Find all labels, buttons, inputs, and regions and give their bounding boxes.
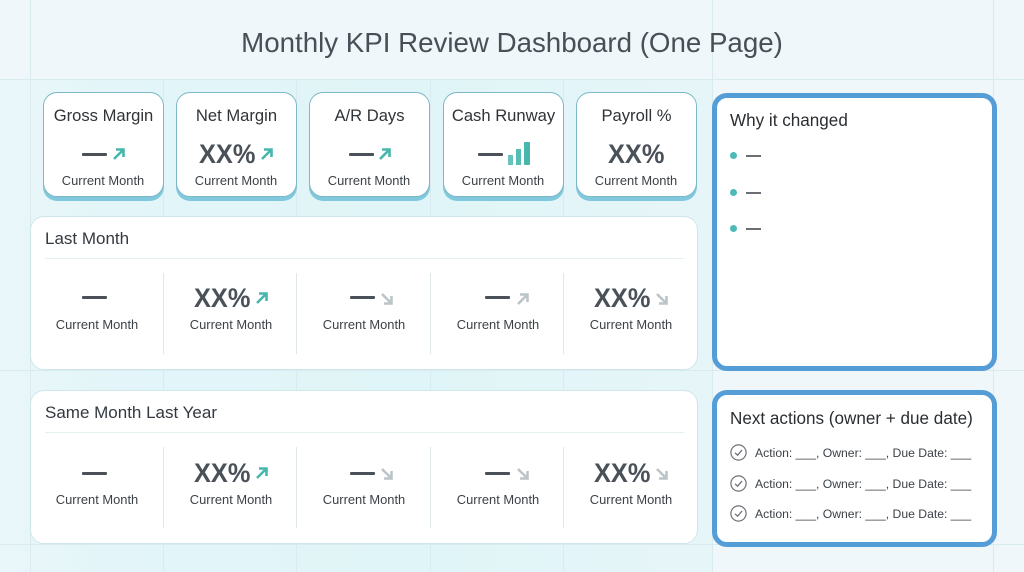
icon: check circle bbox=[730, 444, 747, 461]
KPI card: Payroll % bbox=[576, 92, 697, 197]
panel: Last Month: Current Month bbox=[56, 317, 138, 332]
panel: Why it changed: Why it changed bbox=[730, 111, 848, 130]
icon: up arrow bbox=[261, 148, 273, 160]
icon: check circle bbox=[730, 505, 747, 522]
icon: check circle bbox=[730, 475, 747, 492]
KPI card: Payroll %: Current Month bbox=[595, 173, 677, 188]
icon: up arrow bbox=[379, 148, 391, 160]
icon: up arrow bbox=[113, 148, 125, 160]
panel: Last Month: Current Month bbox=[590, 317, 672, 332]
icon: down arrow bbox=[381, 293, 393, 305]
KPI card: Payroll %: Payroll % bbox=[601, 106, 672, 125]
panel: Same Month Last Year: Current Month bbox=[590, 492, 672, 507]
panel: Same Month Last Year: Same Month Last Year bbox=[45, 403, 217, 422]
icon: up arrow grey bbox=[517, 293, 529, 305]
KPI card: Gross Margin bbox=[43, 92, 164, 197]
panel: Same Month Last Year: Current Month bbox=[190, 492, 272, 507]
panel: Next actions: Action: ___, Owner: ___, Due Date: ___ bbox=[755, 477, 971, 491]
panel: Next actions bbox=[712, 390, 997, 547]
panel: Last Month: XX% bbox=[194, 283, 250, 313]
KPI card: Net Margin: XX% bbox=[199, 139, 255, 169]
panel: Next actions: Action: ___, Owner: ___, Due Date: ___ bbox=[755, 446, 971, 460]
icon: up arrow bbox=[256, 467, 268, 479]
panel: Last Month: Current Month bbox=[190, 317, 272, 332]
KPI card: Cash Runway: Current Month bbox=[462, 173, 544, 188]
title: Monthly KPI Review Dashboard (One Page) bbox=[241, 27, 783, 58]
KPI card: Gross Margin: Current Month bbox=[62, 173, 144, 188]
icon: down arrow bbox=[517, 468, 529, 480]
KPI card: Net Margin bbox=[176, 92, 297, 197]
icon: down arrow bbox=[656, 468, 668, 480]
background tint bbox=[0, 80, 712, 572]
icon: up arrow bbox=[256, 292, 268, 304]
panel: Same Month Last Year bbox=[30, 390, 698, 544]
panel: Same Month Last Year: XX% bbox=[194, 458, 250, 488]
KPI card: Net Margin: Net Margin bbox=[196, 106, 277, 125]
panel: Last Month: XX% bbox=[594, 283, 650, 313]
KPI card: A/R Days: A/R Days bbox=[334, 106, 405, 125]
KPI card: Net Margin: Current Month bbox=[195, 173, 277, 188]
KPI card: Cash Runway: Cash Runway bbox=[452, 106, 555, 125]
icon: down arrow bbox=[656, 293, 668, 305]
panel: Why it changed bbox=[712, 93, 997, 371]
KPI card: A/R Days bbox=[309, 92, 430, 197]
icon: down arrow bbox=[381, 468, 393, 480]
panel: Same Month Last Year: XX% bbox=[594, 458, 650, 488]
KPI card: Payroll %: XX% bbox=[608, 139, 664, 169]
panel: Last Month: Current Month bbox=[457, 317, 539, 332]
panel: Last Month: Current Month bbox=[323, 317, 405, 332]
KPI card: Gross Margin: Gross Margin bbox=[54, 106, 153, 125]
icon: bars bbox=[508, 142, 530, 165]
panel: Same Month Last Year: Current Month bbox=[457, 492, 539, 507]
panel: Same Month Last Year: Current Month bbox=[56, 492, 138, 507]
panel: Last Month: Last Month bbox=[45, 229, 129, 248]
KPI card: Cash Runway bbox=[443, 92, 564, 197]
panel: Last Month bbox=[30, 216, 698, 370]
KPI card: A/R Days: Current Month bbox=[328, 173, 410, 188]
panel: Same Month Last Year: Current Month bbox=[323, 492, 405, 507]
panel: Next actions: Next actions (owner + due date) bbox=[730, 409, 973, 428]
panel: Next actions: Action: ___, Owner: ___, Due Date: ___ bbox=[755, 507, 971, 521]
